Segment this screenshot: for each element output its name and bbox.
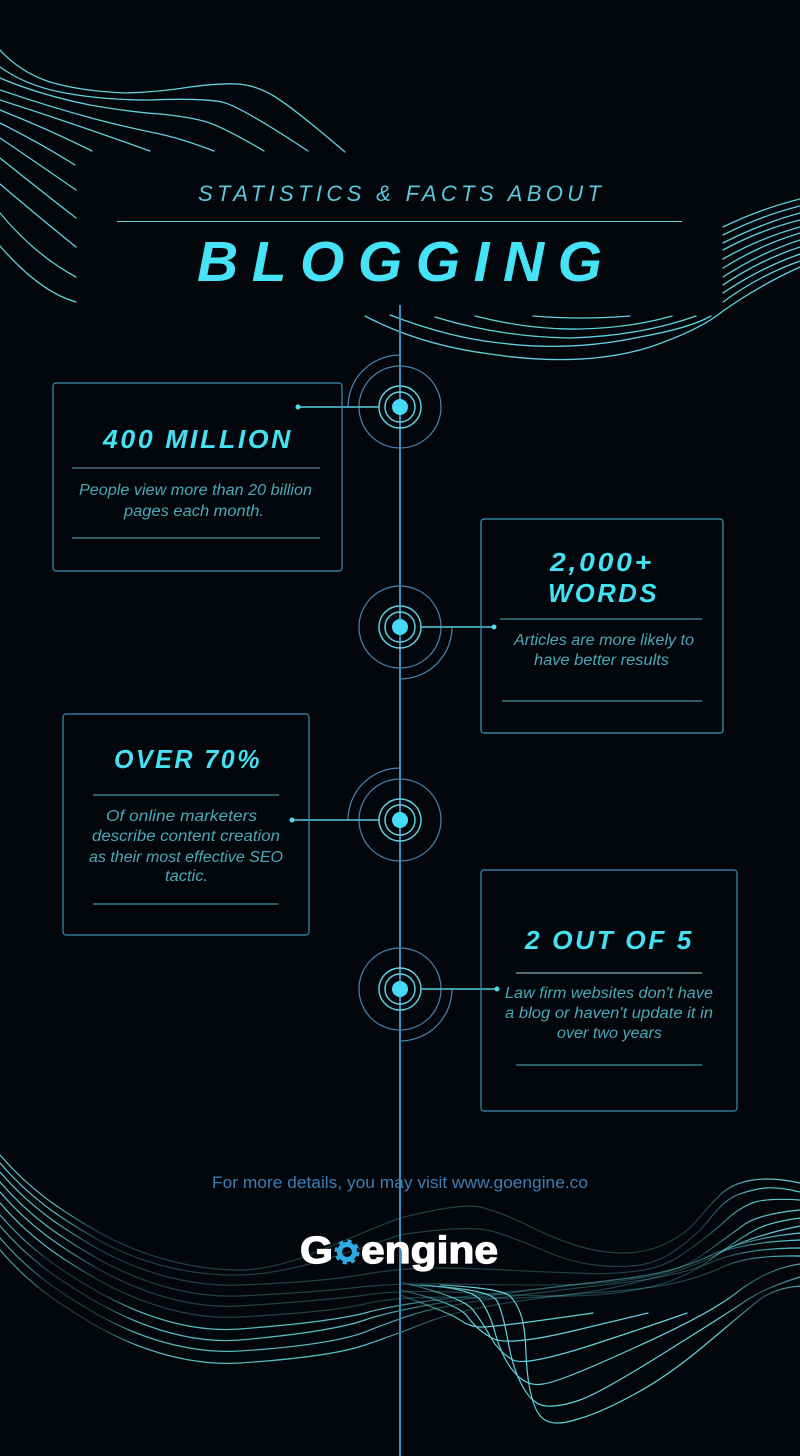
icon: gear	[336, 1241, 358, 1263]
panel: 400 million	[53, 383, 342, 571]
panel: 2,000+ words	[481, 519, 723, 733]
heading: 2 OUT OF 5	[524, 927, 694, 955]
heading	[548, 549, 659, 608]
heading: 2,000+	[549, 549, 654, 577]
heading: OVER 70%	[114, 746, 262, 774]
body text: a blog or haven't update it in	[505, 1005, 713, 1022]
body text	[79, 482, 312, 520]
heading: WORDS	[548, 580, 659, 608]
logo: G	[300, 1230, 333, 1272]
node 2	[359, 586, 496, 679]
panel: 2 out of 5	[481, 870, 737, 1111]
node 1	[296, 355, 441, 448]
panel: over 70%	[63, 714, 309, 935]
node 3	[290, 768, 441, 861]
heading: 400 MILLION	[102, 426, 293, 454]
body text	[513, 632, 694, 669]
body text: Articles are more likely to	[513, 632, 694, 649]
body text	[89, 808, 283, 885]
wave lines: top left	[0, 50, 345, 302]
body text: People view more than 20 billion	[79, 482, 312, 499]
body text: have better results	[534, 652, 669, 669]
title block	[117, 181, 682, 294]
main title: BLOGGING	[197, 230, 602, 294]
body text: tactic.	[165, 868, 208, 885]
wave lines: bottom	[0, 1155, 800, 1423]
logo	[300, 1230, 498, 1272]
body text	[505, 985, 713, 1042]
node 4	[359, 948, 500, 1041]
logo: engine	[361, 1230, 498, 1272]
timeline axis	[399, 305, 401, 1456]
body text: over two years	[557, 1025, 662, 1042]
footer text: For more details, you may visit www.goengine.co	[212, 1173, 588, 1192]
body text: pages each month.	[123, 503, 264, 520]
wave lines: top right	[365, 199, 800, 360]
body text: describe content creation	[92, 828, 280, 845]
body text: Of online marketers	[106, 808, 257, 825]
body text: Law firm websites don't have	[505, 985, 713, 1002]
subtitle: STATISTICS & FACTS ABOUT	[198, 181, 603, 206]
body text: as their most effective SEO	[89, 849, 283, 866]
